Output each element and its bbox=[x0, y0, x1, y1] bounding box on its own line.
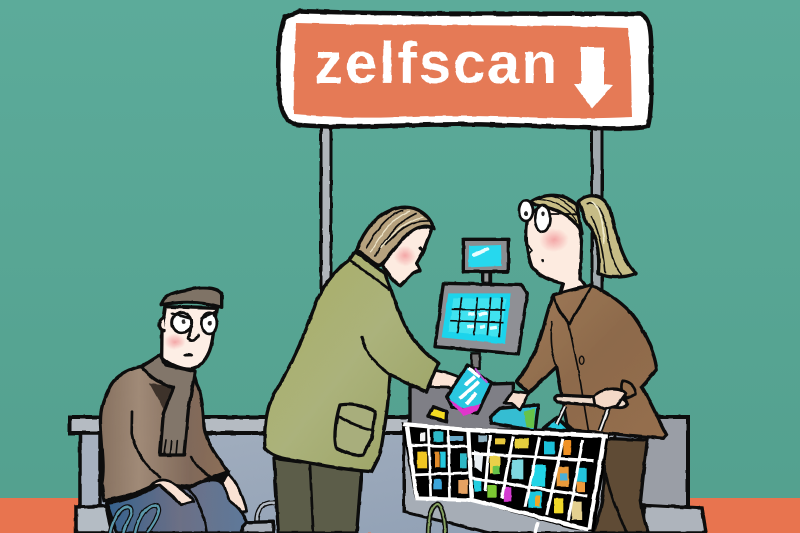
sign text: zelfscan bbox=[314, 31, 557, 96]
wheel loops bbox=[110, 505, 159, 533]
hair bbox=[530, 195, 582, 233]
face bbox=[159, 307, 217, 369]
groceries in cart bbox=[417, 432, 587, 520]
man on bench bbox=[100, 288, 275, 533]
counter bbox=[410, 383, 513, 430]
bench, wall panel and platforms bbox=[70, 417, 706, 533]
scanned package bbox=[447, 365, 492, 416]
basket interior bbox=[403, 423, 607, 530]
woman with cart bbox=[403, 195, 667, 533]
customer display bbox=[463, 239, 508, 272]
coat details bbox=[349, 260, 392, 375]
face bbox=[526, 207, 587, 297]
cap bbox=[162, 288, 222, 307]
legs bbox=[274, 458, 362, 533]
scanner terminal bbox=[410, 239, 527, 430]
ponytail bbox=[578, 196, 636, 277]
sign posts bbox=[321, 120, 602, 295]
coat bbox=[517, 285, 667, 438]
hands on cart bbox=[504, 389, 626, 410]
cart undercarriage bbox=[428, 505, 538, 533]
woman in green coat bbox=[265, 207, 466, 533]
hands bbox=[151, 473, 247, 512]
handle bbox=[555, 395, 627, 431]
coat details bbox=[551, 287, 636, 430]
hand bbox=[430, 370, 466, 395]
wire grid bbox=[403, 424, 607, 529]
items on top of cart bbox=[428, 405, 571, 431]
sign: zelfscan bbox=[278, 11, 651, 128]
pocket bbox=[335, 404, 375, 455]
glasses bbox=[519, 200, 577, 232]
down arrow bbox=[574, 47, 613, 109]
shopping bag bbox=[242, 503, 275, 533]
coat bbox=[265, 252, 438, 472]
scarf bbox=[142, 355, 195, 455]
shopping cart bbox=[403, 423, 607, 533]
face bbox=[382, 227, 432, 286]
display stem bbox=[483, 272, 490, 283]
terminal stem bbox=[472, 353, 480, 368]
leg fold bbox=[188, 488, 207, 533]
trousers bbox=[593, 438, 648, 533]
jacket folds bbox=[132, 412, 214, 479]
jacket bbox=[100, 367, 228, 501]
illustration bbox=[70, 11, 706, 533]
jeans bbox=[107, 480, 252, 533]
main touchscreen bbox=[435, 283, 527, 354]
floor strip bbox=[0, 498, 800, 533]
hair bbox=[357, 207, 434, 266]
